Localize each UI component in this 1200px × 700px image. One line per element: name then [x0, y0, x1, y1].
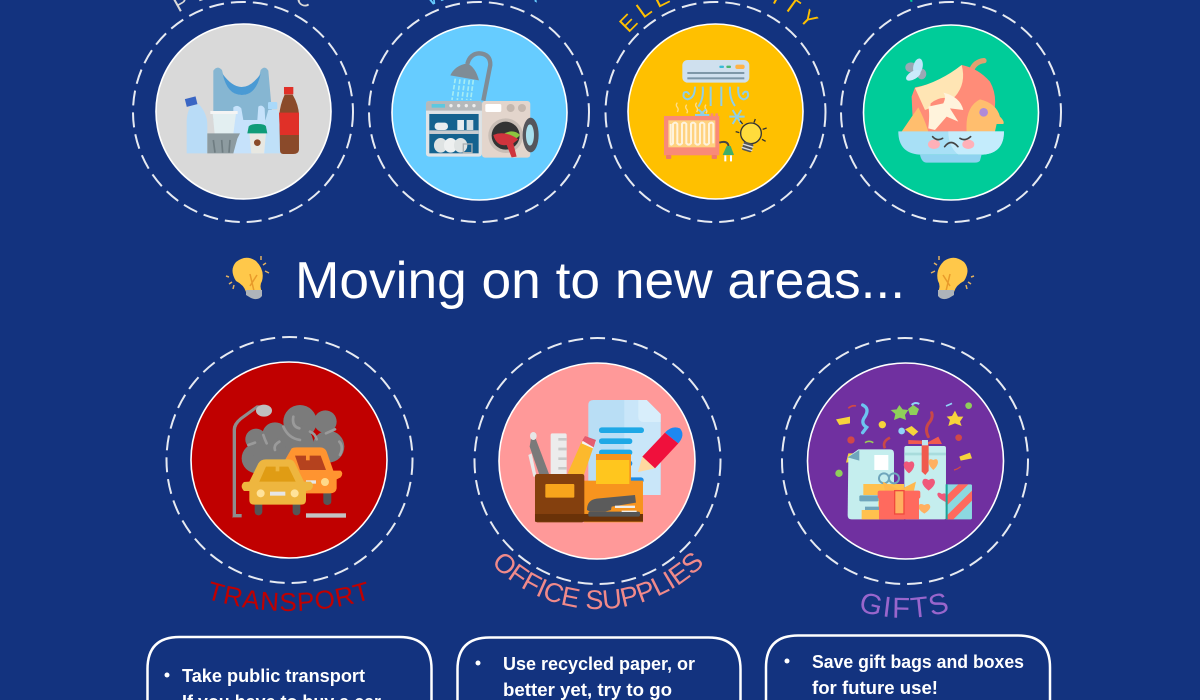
- label: office supplies: OFFICE SUPPLIES: [495, 553, 702, 610]
- icon: stationery set: [528, 400, 682, 522]
- icon: plastic waste: [185, 68, 299, 154]
- callout: gifts tips: [766, 636, 1050, 700]
- callout: office supplies tips: Use recycled paper, or: [503, 654, 695, 674]
- callout: transport tips: [148, 637, 432, 700]
- panel: gifts: [781, 337, 1029, 618]
- panel: transport: [166, 336, 414, 612]
- icon: left light bulb: [226, 256, 269, 299]
- icon: gift boxes and confetti: [835, 402, 972, 519]
- icon: sad bowl of food scraps: [898, 58, 1004, 163]
- icon: right light bulb: [931, 256, 974, 299]
- callout: transport tips: Take public transport: [182, 666, 365, 686]
- panel: water: [368, 0, 590, 223]
- panel: electricity: [604, 0, 826, 223]
- icon: shower, dishwasher and washing machine: [426, 53, 539, 158]
- panel: office supplies: [474, 337, 722, 610]
- heading text: Moving on to new areas...: [295, 252, 905, 310]
- icon: air conditioner, heater and light bulb: [664, 60, 767, 161]
- callout: office supplies tips: better yet, try to go: [503, 680, 672, 700]
- callout: office supplies tips: [458, 638, 740, 700]
- callout: gifts tips: for future use!: [812, 678, 938, 698]
- panel: food: [840, 0, 1062, 223]
- icon: cars in traffic smog: [232, 405, 346, 518]
- label: transport: TRANSPORT: [210, 581, 366, 612]
- panel: plastic: [132, 0, 354, 223]
- heading: moving on to new areas: [226, 252, 974, 310]
- callout: gifts tips: Save gift bags and boxes: [812, 652, 1024, 672]
- label: gifts: GIFTS: [861, 594, 948, 618]
